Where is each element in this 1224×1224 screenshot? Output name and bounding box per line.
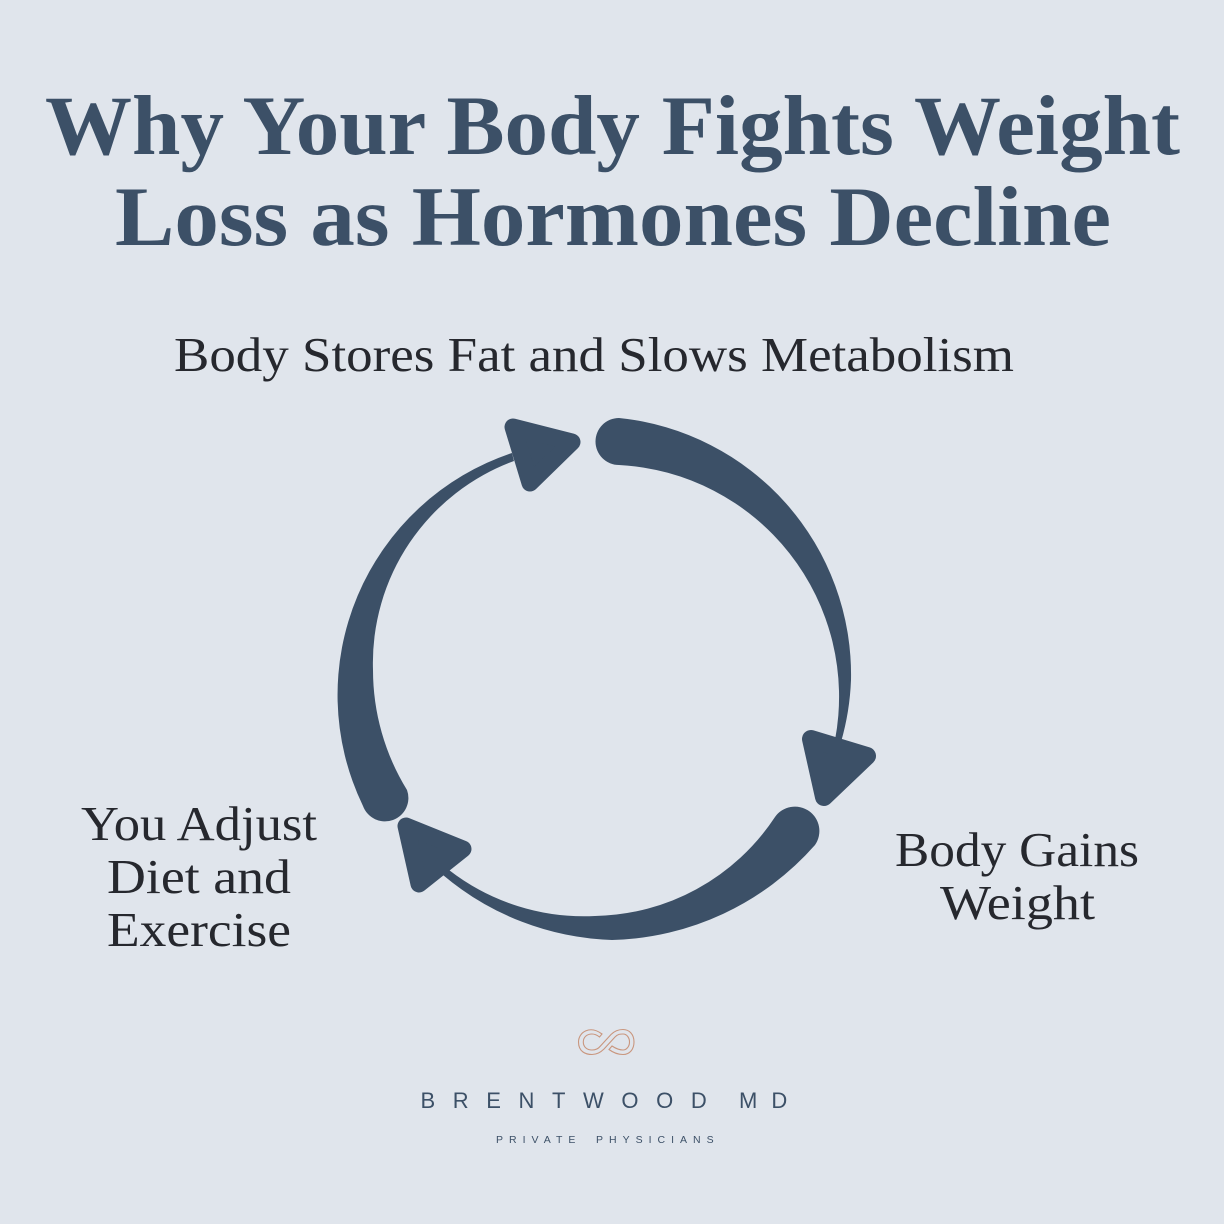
arrow: right to bottom left bbox=[406, 807, 819, 940]
title: Loss as Hormones Decline bbox=[115, 170, 1111, 264]
arrow: left to top bbox=[338, 427, 572, 821]
label: you adjust diet and exercise: You Adjust bbox=[81, 796, 317, 851]
label: you adjust diet and exercise: Exercise bbox=[107, 902, 291, 957]
logo: brentwood md bbox=[420, 1030, 801, 1146]
label: you adjust diet and exercise: Diet and bbox=[107, 849, 291, 904]
title: Why Your Body Fights Weight bbox=[45, 79, 1180, 173]
logo tagline: PRIVATE bbox=[496, 1134, 581, 1146]
arrow: top to right bbox=[596, 418, 867, 797]
logo wordmark: BRENTWOOD bbox=[420, 1088, 724, 1113]
title bbox=[45, 79, 1180, 264]
label: body stores fat: Body Stores Fat and Slows Metabolism bbox=[174, 327, 1014, 382]
logo wordmark: MD bbox=[739, 1088, 801, 1113]
cycle diagram bbox=[338, 418, 867, 940]
label: you adjust diet and exercise bbox=[81, 796, 317, 957]
logo tagline: PHYSICIANS bbox=[596, 1134, 720, 1146]
label: body gains weight bbox=[895, 822, 1139, 930]
label: body gains weight: Weight bbox=[940, 875, 1095, 930]
icon: infinity mark bbox=[578, 1030, 634, 1054]
label: body gains weight: Body Gains bbox=[895, 822, 1139, 877]
